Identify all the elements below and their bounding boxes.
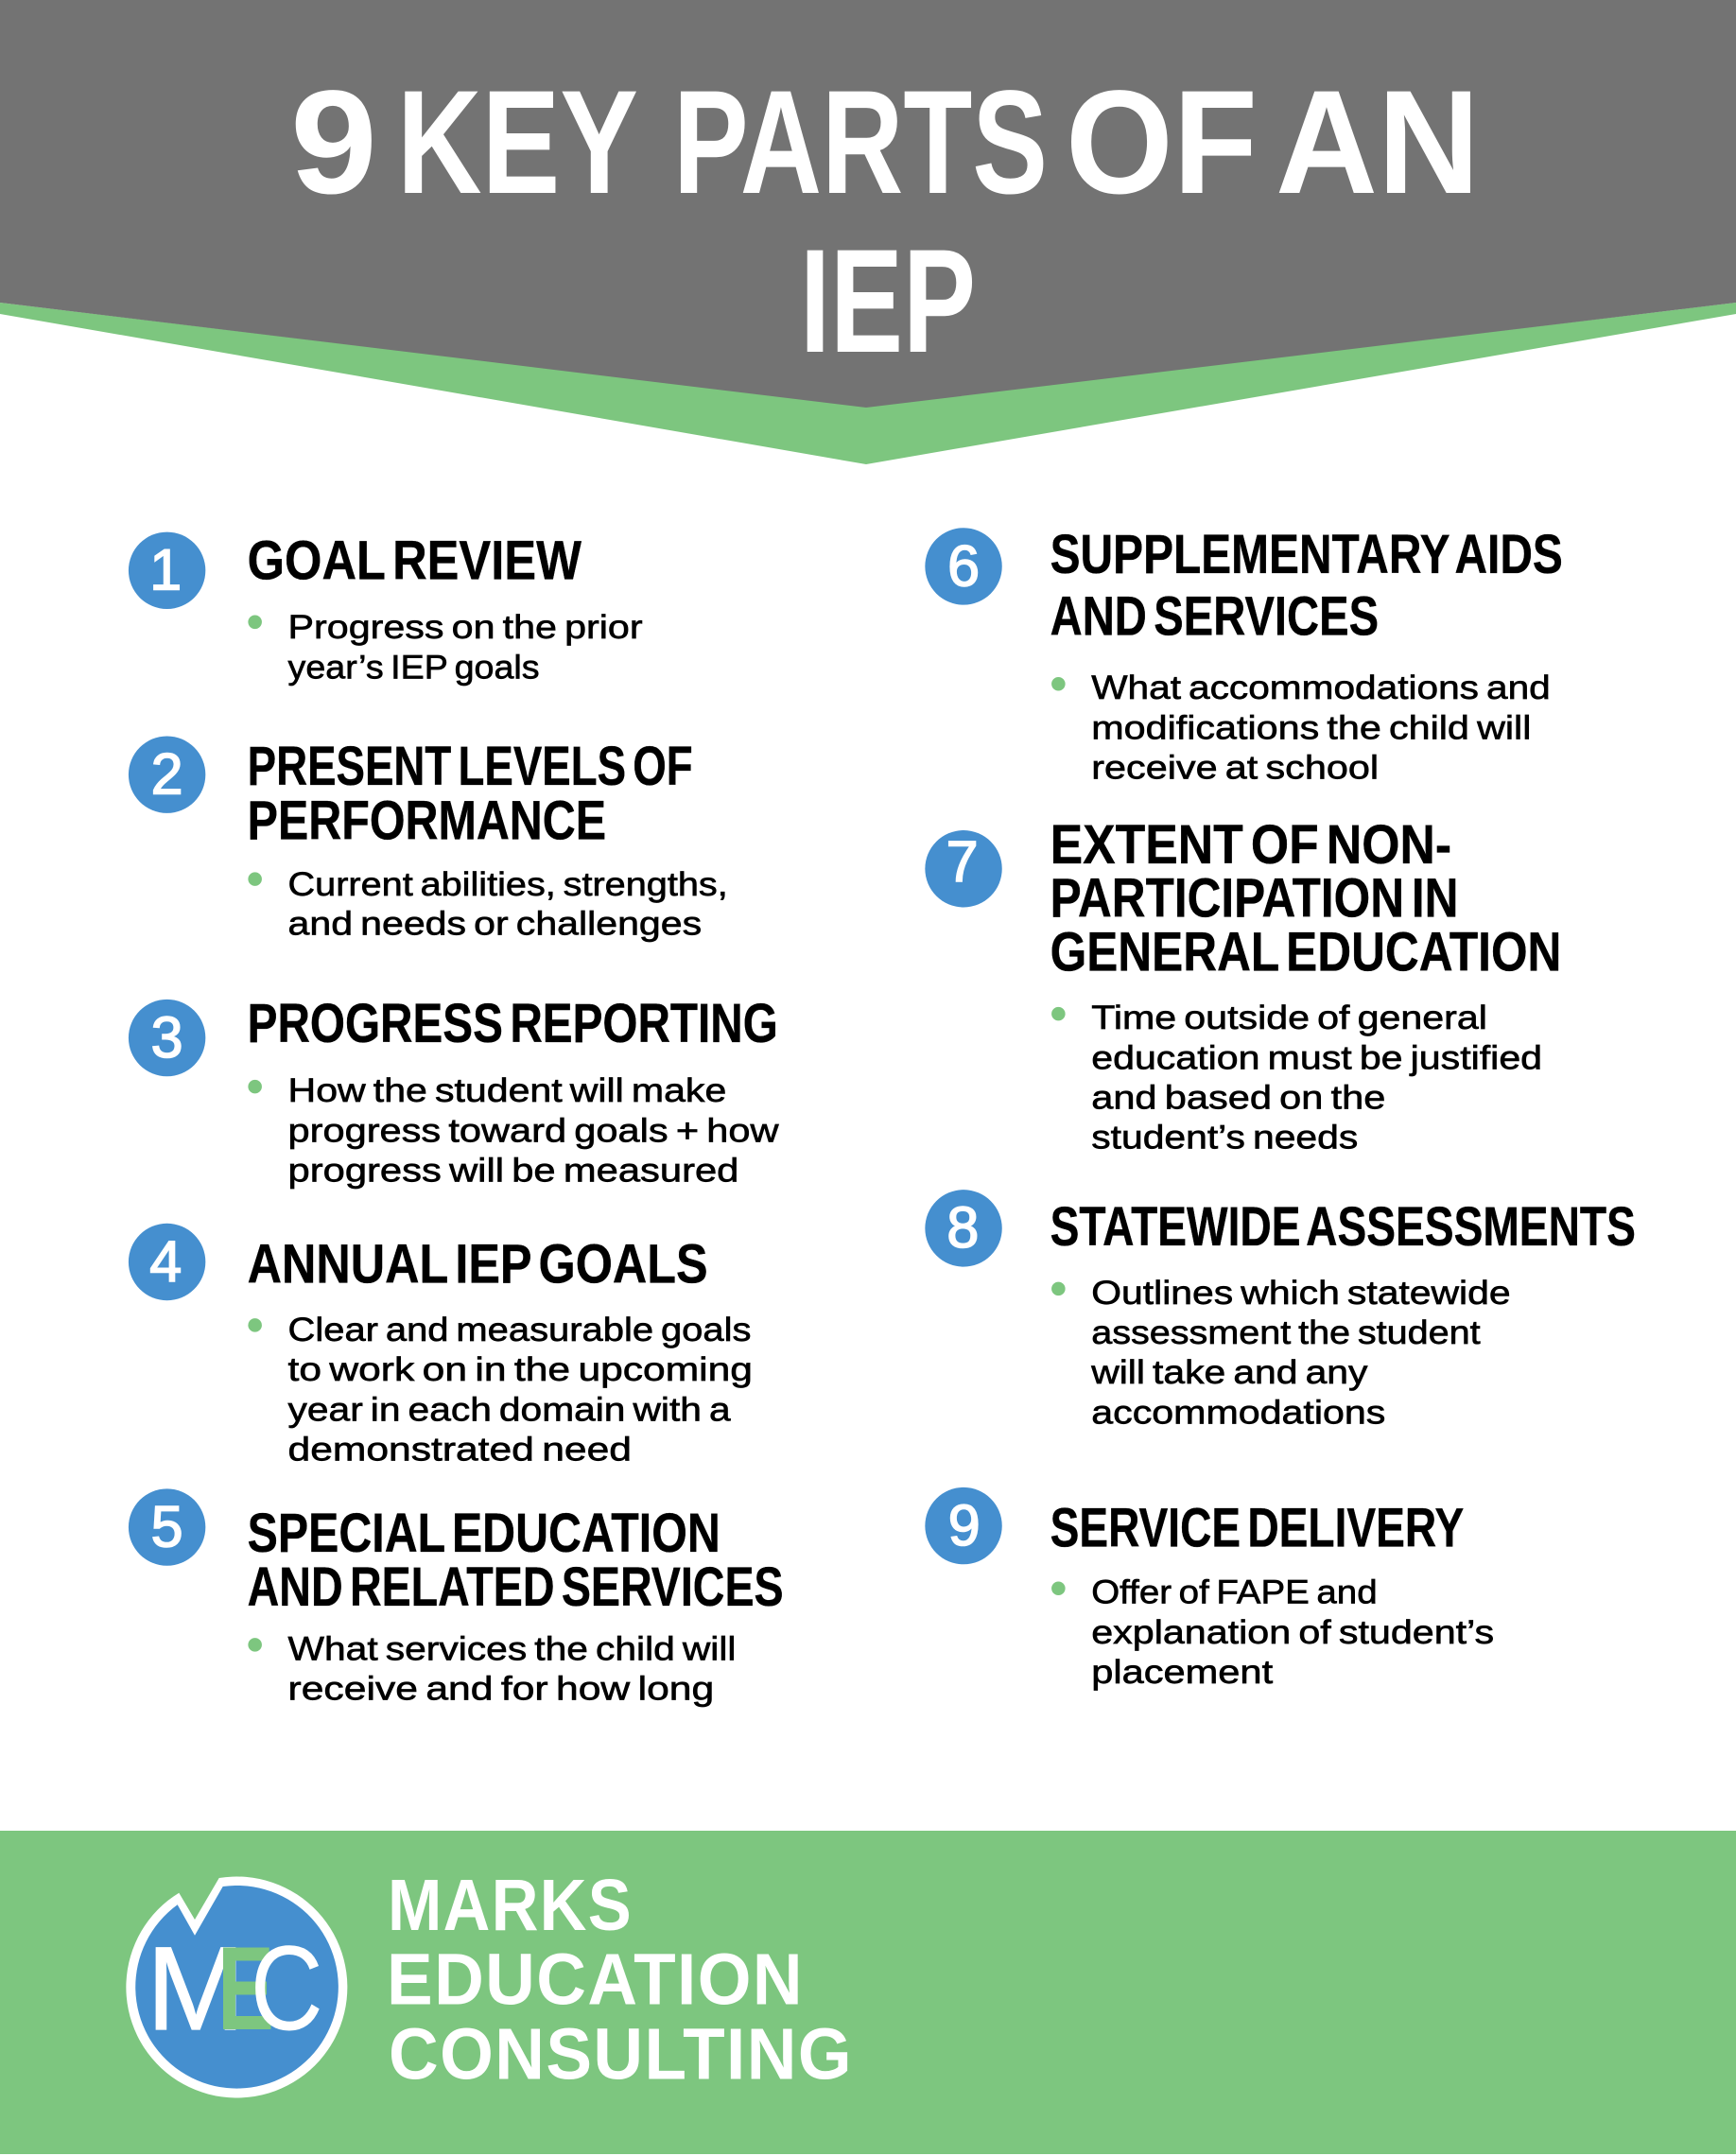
bullet 5 — [248, 1638, 262, 1652]
number badge 1: 1 — [149, 538, 182, 602]
number badge 3: 3 — [151, 1005, 183, 1069]
heading 5 — [248, 1503, 784, 1618]
description 5 — [288, 1629, 736, 1708]
company name: CONSULTING — [389, 2013, 853, 2095]
description 8: accommodations — [1091, 1393, 1385, 1431]
heading 2: PERFORMANCE — [248, 790, 606, 851]
description 6: What accommodations and — [1091, 669, 1551, 706]
heading 1: GOAL REVIEW — [248, 530, 582, 592]
title: 9 — [290, 61, 377, 225]
description 4: year in each domain with a — [288, 1390, 731, 1428]
description 1 — [288, 608, 643, 686]
description 4: to work on in the upcoming — [288, 1350, 753, 1388]
description 7 — [1091, 999, 1542, 1156]
list of nine parts — [129, 524, 1636, 1708]
title: PARTS — [673, 61, 1048, 225]
bullet 8 — [1051, 1282, 1066, 1295]
item 5: special education and related services — [129, 1488, 784, 1708]
description 3: progress will be measured — [288, 1151, 738, 1189]
number badge 6: 6 — [947, 533, 980, 598]
company name: EDUCATION — [387, 1939, 804, 2020]
title: AN — [1276, 61, 1480, 225]
description 6: modifications the child will — [1091, 708, 1531, 746]
heading 4: ANNUAL IEP GOALS — [248, 1233, 708, 1295]
number badge 7: 7 — [946, 829, 979, 894]
number badge 2 — [129, 736, 205, 813]
item 1: goal review — [129, 530, 643, 686]
heading 7: EXTENT OF NON- — [1050, 814, 1451, 876]
heading 2 — [248, 736, 693, 851]
description 9: Offer of FAPE and — [1091, 1574, 1378, 1611]
bullet 7 — [1051, 1007, 1066, 1020]
number badge 9 — [925, 1487, 1002, 1564]
heading 5: SPECIAL EDUCATION — [248, 1503, 720, 1564]
bullet 9 — [1051, 1581, 1066, 1595]
number badge 8 — [925, 1190, 1002, 1267]
number badge 8: 8 — [946, 1195, 979, 1260]
number badge 2: 2 — [151, 742, 183, 807]
bullet 6 — [1051, 677, 1066, 690]
description 8 — [1090, 1274, 1511, 1431]
description 3: How the student will make — [288, 1071, 726, 1109]
description 8: Outlines which statewide — [1091, 1274, 1511, 1312]
description 2 — [288, 865, 728, 943]
title: OF — [1066, 61, 1258, 225]
description 7: education must be justified — [1091, 1038, 1542, 1076]
bullet 4 — [248, 1318, 262, 1332]
item 7: extent of non-participation — [925, 814, 1561, 1156]
footer band — [0, 1831, 1736, 2154]
description 5: receive and for how long — [288, 1670, 714, 1708]
item 4: annual iep goals — [129, 1224, 753, 1469]
number badge 4: 4 — [149, 1229, 182, 1294]
description 1: year’s IEP goals — [288, 648, 540, 686]
logo: MEC circle: E — [217, 1923, 274, 2055]
item 6: supplementary aids and services — [925, 524, 1563, 787]
heading 7: GENERAL EDUCATION — [1050, 921, 1561, 982]
title: IEP — [800, 219, 976, 384]
description 4: Clear and measurable goals — [288, 1311, 751, 1348]
heading 5: AND RELATED SERVICES — [248, 1556, 784, 1618]
description 7: student’s needs — [1091, 1119, 1358, 1156]
company name: MARKS — [388, 1865, 633, 1946]
description 8: will take and any — [1090, 1353, 1368, 1391]
heading 6: SUPPLEMENTARY AIDS — [1050, 524, 1563, 585]
item 3: progress reporting — [129, 993, 779, 1189]
logo: MEC circle: M — [147, 1923, 245, 2055]
heading 7 — [1050, 814, 1561, 982]
description 9: placement — [1091, 1653, 1273, 1691]
description 7: Time outside of general — [1091, 999, 1487, 1036]
title: KEY — [397, 61, 638, 225]
description 4 — [288, 1311, 753, 1469]
description 1: Progress on the prior — [288, 608, 643, 646]
company name — [387, 1865, 853, 2095]
description 9: explanation of student’s — [1091, 1613, 1494, 1651]
heading 9: SERVICE DELIVERY — [1050, 1497, 1464, 1558]
logo: MEC circle — [126, 1877, 347, 2098]
description 8: assessment the student — [1091, 1313, 1481, 1351]
heading 6 — [1050, 524, 1563, 648]
number badge 1 — [129, 532, 205, 609]
bullet 1 — [248, 616, 262, 629]
description 4: demonstrated need — [288, 1431, 632, 1469]
bullet 2 — [248, 872, 262, 886]
description 3 — [288, 1071, 779, 1189]
logo: MEC circle: C — [251, 1921, 323, 2056]
description 9 — [1091, 1574, 1494, 1691]
number badge 5: 5 — [151, 1494, 183, 1558]
item 2: present levels of performance — [129, 736, 728, 943]
description 3: progress toward goals + how — [288, 1111, 779, 1149]
heading 2: PRESENT LEVELS OF — [248, 736, 693, 797]
number badge 3 — [129, 1000, 205, 1076]
heading 6: AND SERVICES — [1050, 586, 1379, 648]
description 6: receive at school — [1091, 749, 1379, 787]
heading 3: PROGRESS REPORTING — [248, 993, 778, 1054]
number badge 9: 9 — [948, 1493, 981, 1557]
description 7: and based on the — [1091, 1078, 1385, 1116]
description 2: Current abilities, strengths, — [288, 865, 728, 903]
number badge 5 — [129, 1488, 205, 1566]
description 6 — [1091, 669, 1551, 787]
title — [290, 61, 1480, 384]
heading 7: PARTICIPATION IN — [1050, 868, 1458, 930]
description 5: What services the child will — [288, 1629, 736, 1667]
bullet 3 — [248, 1080, 262, 1093]
header banner — [0, 0, 1736, 464]
item 8: statewide assessments — [925, 1190, 1636, 1431]
number badge 4 — [129, 1224, 205, 1300]
number badge 6 — [925, 528, 1002, 605]
item 9: service delivery — [925, 1487, 1494, 1691]
description 2: and needs or challenges — [288, 905, 702, 943]
number badge 7 — [925, 829, 1002, 907]
